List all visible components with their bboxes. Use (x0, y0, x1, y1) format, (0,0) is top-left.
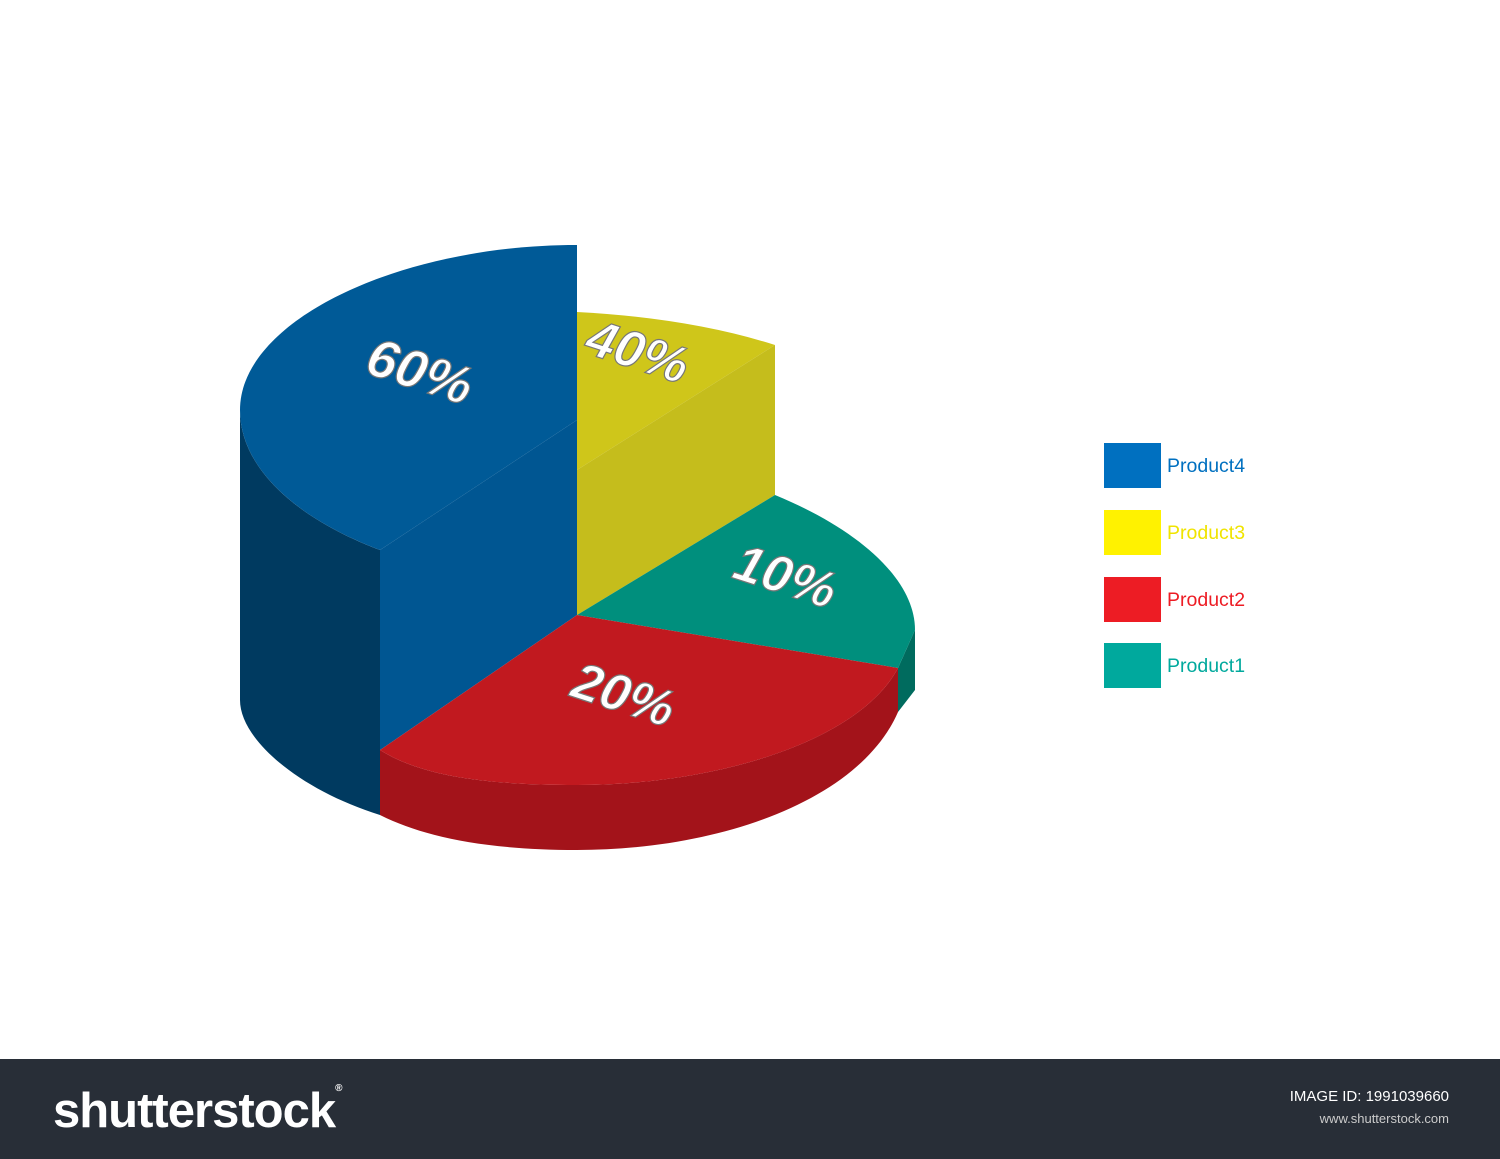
legend: product1 (1104, 643, 1245, 688)
image id: www.shutterstock.com (1320, 1111, 1449, 1126)
slice: product4 blue 60%: 60% (359, 327, 481, 417)
legend: product3 (1104, 510, 1245, 555)
image id (1290, 1088, 1449, 1126)
slice: product2 red 20% (380, 615, 898, 850)
legend: Product1 (1167, 655, 1245, 677)
footer logo: shutterstock® (53, 1083, 341, 1138)
legend: Product3 (1167, 522, 1245, 544)
slice: product4 blue 60% (240, 245, 577, 815)
legend: product4 (1104, 443, 1245, 488)
footer bar (0, 1059, 1500, 1159)
legend: Product4 (1167, 455, 1245, 477)
slice: product1 teal 10%: 10% (727, 533, 844, 621)
slice: product2 red 20%: 20% (564, 651, 682, 739)
legend: product2 (1104, 577, 1245, 622)
slice: product3 yellow 40%: 40% (578, 308, 696, 396)
legend (1104, 443, 1245, 688)
slice: product1 teal 10% (577, 495, 915, 712)
slice: product3 yellow 40% (577, 308, 775, 615)
image id: IMAGE ID: 1991039660 (1290, 1088, 1449, 1105)
legend: Product2 (1167, 589, 1245, 611)
